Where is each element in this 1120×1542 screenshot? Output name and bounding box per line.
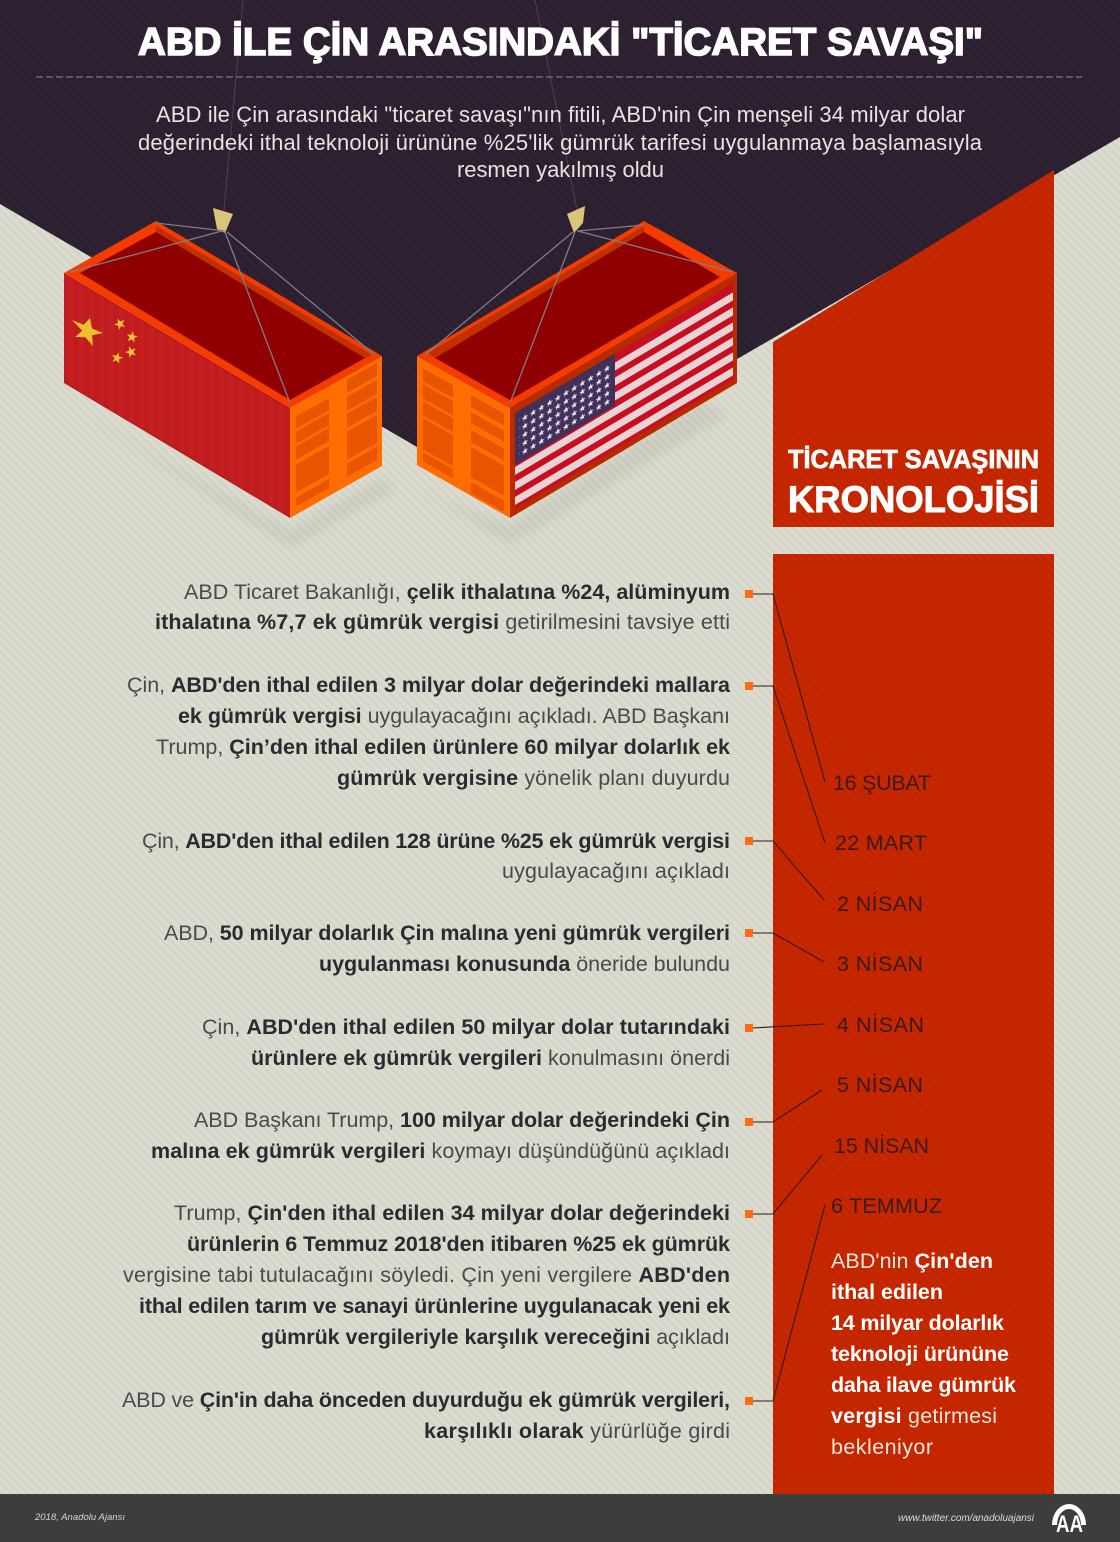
expected event note: ABD'nin Çin'den: [831, 1249, 993, 1273]
event: 6 Temmuz: karşılıklı olarak yürürlüğe girdi: [424, 1419, 730, 1443]
event: 22 Mart: ek gümrük vergisi uygulayacağını açıkladı. ABD Başkanı: [178, 704, 730, 728]
event: 5 Nisan: ABD Başkanı Trump, 100 milyar dolar değerindeki Çin: [194, 1108, 730, 1132]
door end: [290, 356, 382, 518]
event: 6 Temmuz: [122, 1388, 730, 1443]
timeline dates: 5 NİSAN: [837, 1073, 923, 1097]
expected event note: bekleniyor: [831, 1435, 933, 1459]
twitter address: www.twitter.com/anadoluajansi: [898, 1513, 1035, 1524]
event: 2 Nisan: [142, 829, 730, 883]
event: 22 Mart: Çin, ABD'den ithal edilen 3 milyar dolar değerindeki mallara: [127, 673, 731, 697]
timeline dates: 15 NİSAN: [834, 1134, 929, 1158]
event: 2 Nisan: Çin, ABD'den ithal edilen 128 ürüne %25 ek gümrük vergisi: [142, 829, 730, 853]
open top: [64, 221, 382, 408]
icon: AA logo: [1052, 1504, 1086, 1538]
event: 22 Mart: Trump, Çin’den ithal edilen ürünlere 60 milyar dolarlık ek: [156, 735, 730, 759]
expected event note: 14 milyar dolarlık: [831, 1311, 1004, 1335]
side with flag: [64, 273, 290, 518]
event: 4 Nisan: [202, 1015, 730, 1070]
timeline dates: 16 ŞUBAT: [833, 771, 931, 795]
hook: [567, 206, 585, 233]
event: 15 Nisan: gümrük vergileriyle karşılık vereceğini açıkladı: [261, 1325, 730, 1349]
title: ABD İLE ÇİN ARASINDAKİ "TİCARET SAVAŞI": [138, 21, 983, 64]
expected event note: teknoloji ürününe: [831, 1342, 1009, 1366]
event: 5 Nisan: malına ek gümrük vergileri koymayı düşündüğünü açıkladı: [151, 1139, 730, 1163]
event: 22 Mart: [127, 673, 731, 790]
intro text: resmen yakılmış oldu: [457, 157, 664, 182]
container shadows: [75, 400, 730, 548]
crane cables: [224, 0, 577, 210]
panel: chronology heading: TİCARET SAVAŞININ: [788, 446, 1039, 474]
event: 15 Nisan: ürünlerin 6 Temmuz 2018'den itibaren %25 ek gümrük: [187, 1232, 730, 1256]
door end: [417, 356, 510, 518]
intro text: ABD ile Çin arasındaki "ticaret savaşı"nın fitili, ABD'nin Çin menşeli 34 milyar dolar: [156, 102, 965, 127]
panel: chronology heading: KRONOLOJİSİ: [788, 479, 1039, 520]
expected event note: vergisi getirmesi: [831, 1404, 997, 1428]
intro text: değerindeki ithal teknoloji ürününe %25'lik gümrük tarifesi uygulanmaya başlamasıyla: [138, 130, 983, 155]
timeline dates: 3 NİSAN: [837, 952, 923, 976]
timeline connectors: [752, 594, 825, 1401]
timeline dates: 4 NİSAN: [837, 1013, 924, 1037]
timeline markers: [745, 590, 753, 1405]
event: 2 Nisan: uygulayacağını açıkladı: [502, 859, 730, 883]
copyright: 2018, Anadolu Ajansı: [34, 1512, 125, 1523]
ropes: [70, 223, 375, 403]
side with flag: [510, 273, 737, 518]
event: 16 Şubat: ithalatına %7,7 ek gümrük vergisi getirilmesini tavsiye etti: [155, 610, 730, 634]
intro text: [138, 102, 983, 182]
timeline event texts: [122, 580, 731, 1443]
panel: chronology heading: [773, 170, 1054, 527]
timeline dates: 22 MART: [835, 831, 927, 855]
event: 6 Temmuz: ABD ve Çin'in daha önceden duyurduğu ek gümrük vergileri,: [122, 1388, 730, 1412]
event: 16 Şubat: [155, 580, 730, 634]
open top: [417, 221, 737, 408]
China container: [64, 208, 382, 518]
panel: chronology dates: [773, 554, 1054, 1494]
event: 15 Nisan: [123, 1201, 730, 1349]
timeline dates: [831, 771, 942, 1218]
USA container: [417, 206, 737, 518]
event: 3 Nisan: [164, 921, 730, 976]
footer: [0, 1494, 1120, 1542]
ropes: [425, 225, 733, 403]
expected event note: [831, 1249, 1016, 1459]
event: 16 Şubat: ABD Ticaret Bakanlığı, çelik ithalatına %24, alüminyum: [184, 580, 730, 604]
event: 3 Nisan: ABD, 50 milyar dolarlık Çin malına yeni gümrük vergileri: [164, 921, 730, 945]
timeline dates: 2 NİSAN: [837, 892, 923, 916]
event: 15 Nisan: ithal edilen tarım ve sanayi ürünlerine uygulanacak yeni ek: [139, 1294, 730, 1318]
hook: [213, 208, 233, 233]
event: 4 Nisan: ürünlere ek gümrük vergileri konulmasını önerdi: [251, 1046, 730, 1070]
event: 5 Nisan: [151, 1108, 730, 1163]
icon: AA logo: AA: [1056, 1511, 1083, 1538]
event: 4 Nisan: Çin, ABD'den ithal edilen 50 milyar dolar tutarındaki: [202, 1015, 730, 1039]
event: 15 Nisan: Trump, Çin'den ithal edilen 34 milyar dolar değerindeki: [174, 1201, 730, 1225]
dark header shape: [0, 0, 1120, 496]
event: 15 Nisan: vergisine tabi tutulacağını söyledi. Çin yeni vergilere ABD'den: [123, 1263, 730, 1287]
timeline dates: 6 TEMMUZ: [831, 1194, 942, 1218]
expected event note: daha ilave gümrük: [831, 1373, 1016, 1397]
expected event note: ithal edilen: [831, 1280, 943, 1304]
event: 3 Nisan: uygulanması konusunda öneride bulundu: [319, 952, 730, 976]
event: 22 Mart: gümrük vergisine yönelik planı duyurdu: [337, 766, 730, 790]
